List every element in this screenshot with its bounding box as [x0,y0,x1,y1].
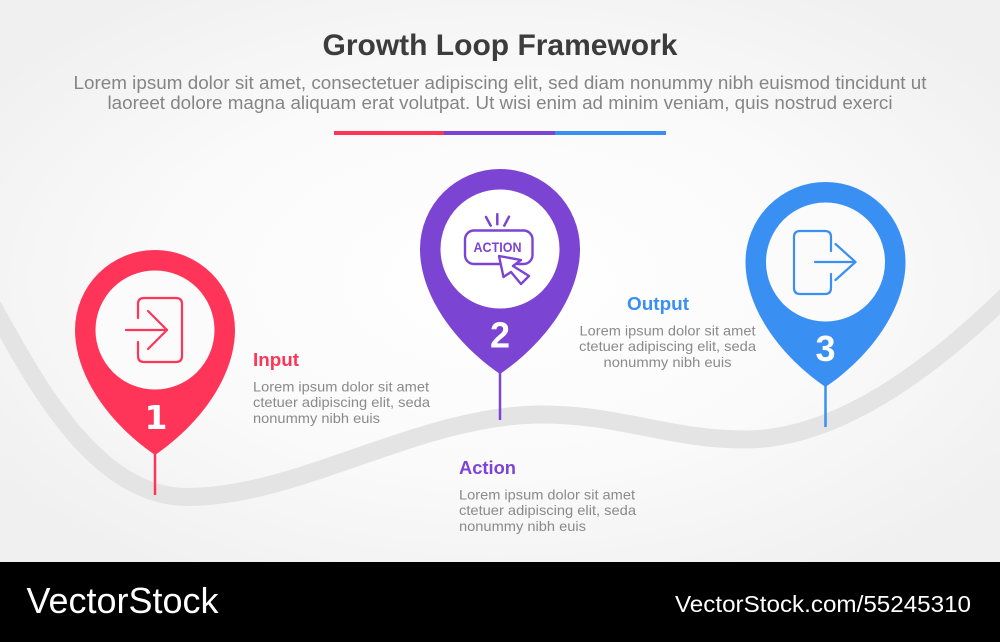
subtitle text [74,73,926,113]
footer bar [0,562,1000,642]
text block: output: nonummy nibh euis [604,354,732,370]
subtitle text: laoreet dolore magna aliquam erat volutpat. Ut wisi enim ad minim veniam, quis nostrud exerci [108,93,892,113]
text block: input: nonummy nibh euis [253,410,380,426]
pin 3: output [746,182,906,427]
text block: output: Output [627,294,689,314]
text block: output: ctetuer adipiscing elit, seda [579,338,756,354]
pin 2: action [420,169,580,420]
text block: action: ctetuer adipiscing elit, seda [459,502,636,518]
number 3: 3 [815,328,836,369]
icon: action button with cursor: ACTION [474,239,522,255]
text block: action: Lorem ipsum dolor sit amet [459,486,635,502]
text block: input [253,350,430,426]
text block: action: nonummy nibh euis [459,518,586,534]
text block: action [459,458,636,534]
wavy road [0,296,1000,497]
text block: input: Lorem ipsum dolor sit amet [253,378,429,394]
tricolor divider [334,131,666,135]
icon: exit arrow [794,231,856,294]
footer url text: VectorStock.com/55245310 [675,591,971,617]
text block: output [579,294,756,370]
text block: output: Lorem ipsum dolor sit amet [580,322,756,338]
number 2: 2 [490,314,510,356]
icon: action button with cursor [465,214,532,284]
subtitle text: Lorem ipsum dolor sit amet, consectetuer adipiscing elit, sed diam nonummy nibh euismod tincidunt ut [74,73,926,93]
pin 1: input [75,250,235,495]
title: Growth Loop Framework [322,29,678,62]
number 1: 1 [145,398,167,437]
icon: enter arrow [126,298,182,362]
footer logo text: VectorStock [26,580,219,621]
text block: action: Action [459,458,516,478]
text block: input: Input [253,350,299,370]
text block: input: ctetuer adipiscing elit, seda [253,394,430,410]
